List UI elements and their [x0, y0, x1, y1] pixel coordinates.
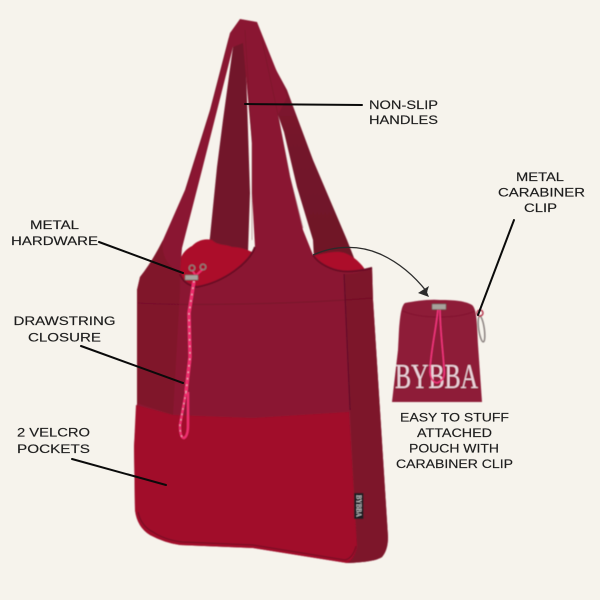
pocket seam: [138, 512, 356, 560]
pouch hardware: [432, 304, 446, 310]
pouch logo: BYBBA: [395, 357, 478, 396]
callout: drawstring closure: DRAWSTRING: [14, 315, 116, 328]
carabiner clip: [477, 310, 486, 342]
left body tone: [137, 240, 180, 415]
callout: non-slip handles: [245, 99, 438, 127]
right side panel: [344, 267, 388, 563]
callout: drawstring closure: [14, 315, 183, 383]
callout: velcro pockets: 2 VELCRO: [17, 426, 90, 440]
pocket: [134, 405, 357, 563]
callout: velcro pockets: [17, 426, 166, 485]
red lining right: [312, 252, 366, 280]
pouch caption: POUCH WITH: [409, 442, 499, 456]
handle stitching: [186, 30, 303, 240]
waist seam: [138, 298, 372, 304]
callout: carabiner clip: CARABINER: [498, 186, 585, 200]
metal hardware: [185, 264, 206, 280]
main body with handles: [134, 19, 388, 563]
red lining left: [178, 239, 252, 288]
pouch caption: EASY TO STUFF: [400, 412, 509, 424]
stuff pouch: [392, 300, 486, 402]
back handle panel: [209, 38, 250, 252]
callout: non-slip handles: HANDLES: [369, 114, 438, 127]
callout: metal hardware: METAL: [30, 219, 80, 232]
callout: velcro pockets: POCKETS: [17, 443, 90, 456]
pouch caption: [396, 412, 513, 471]
callout: drawstring closure: CLOSURE: [28, 332, 101, 344]
mouth seams: [180, 247, 372, 287]
side seam: [344, 274, 350, 410]
pouch gather: [403, 311, 475, 317]
woven label: BYBBA: [354, 495, 362, 517]
pouch caption: CARABINER CLIP: [396, 458, 513, 471]
callout: carabiner clip: CLIP: [524, 202, 557, 215]
callout: metal hardware: HARDWARE: [11, 235, 98, 248]
curved arrow to pouch: [313, 247, 429, 297]
callout: metal hardware: [11, 219, 183, 273]
right back strap: [268, 55, 358, 268]
pouch cord: [430, 309, 444, 383]
tote bag: [134, 19, 388, 563]
callout: carabiner clip: [478, 171, 585, 315]
callout: non-slip handles: NON-SLIP: [369, 99, 438, 112]
drawstring cord: [180, 281, 194, 438]
pouch caption: ATTACHED: [417, 427, 492, 440]
pouch body: [392, 300, 482, 402]
callout: carabiner clip: METAL: [516, 171, 565, 184]
